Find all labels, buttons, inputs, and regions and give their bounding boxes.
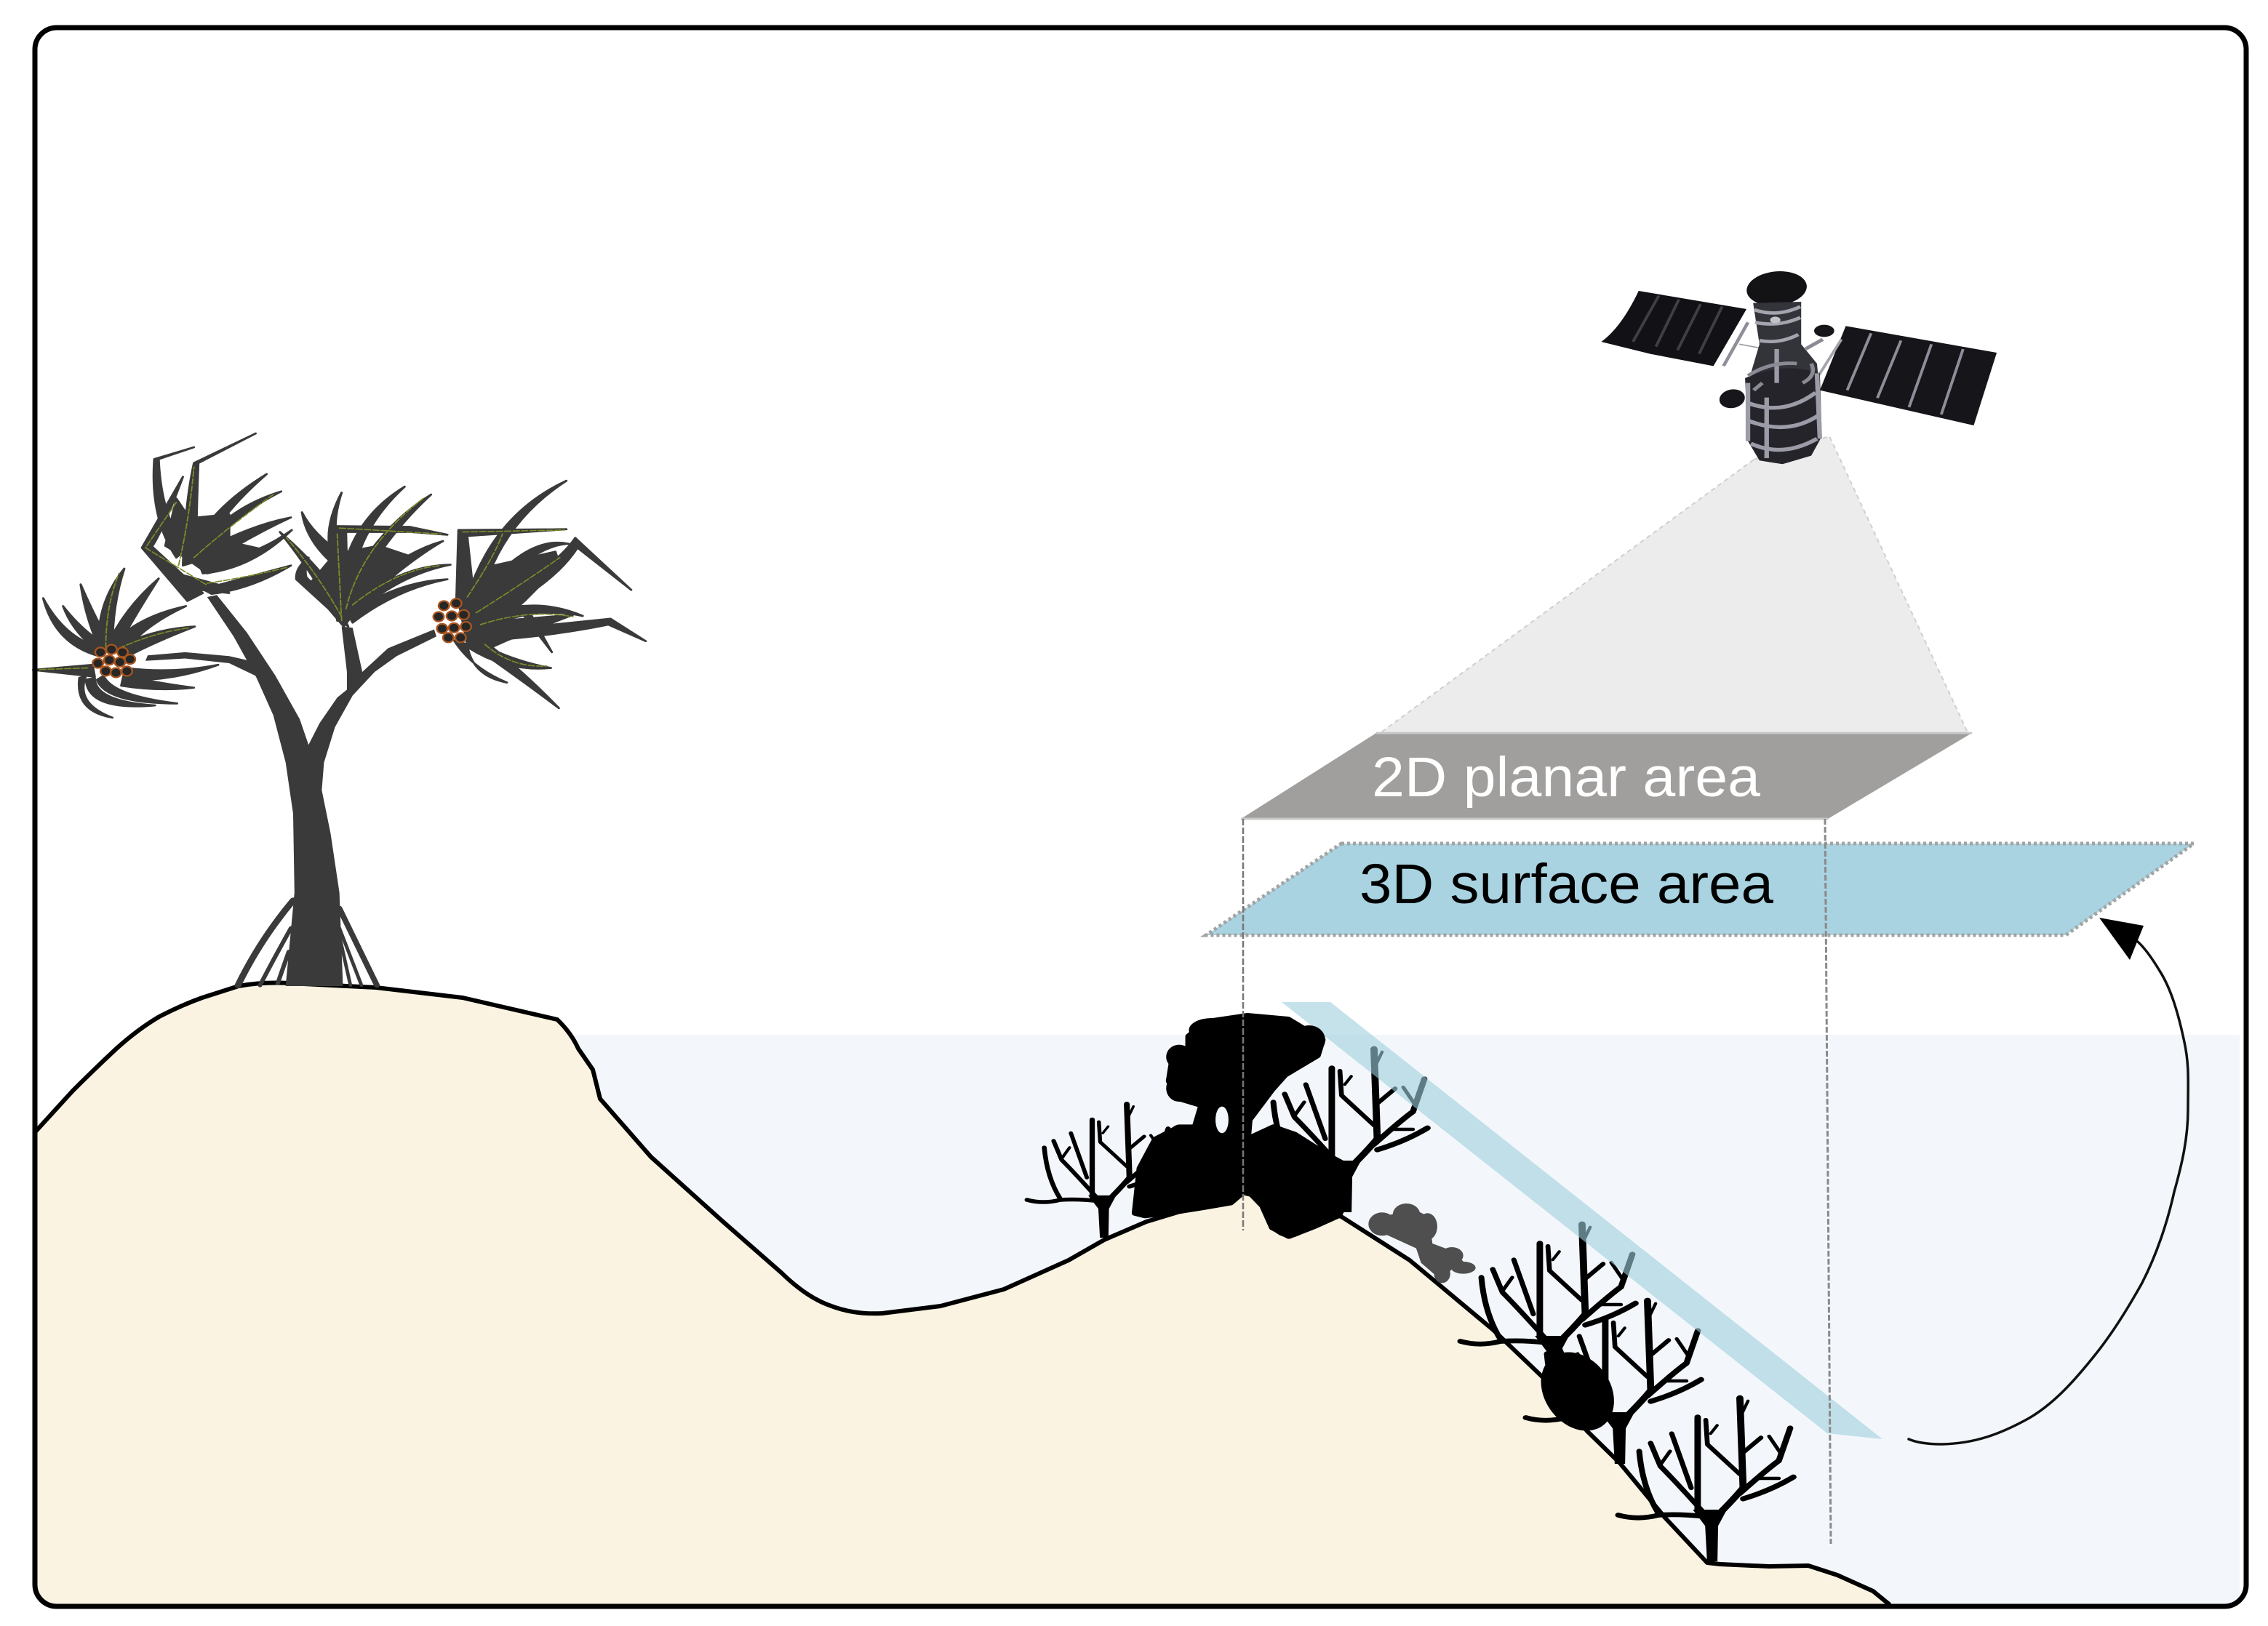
- prop roots: [238, 900, 377, 985]
- label: 2D planar area: 2D planar area: [1372, 746, 1760, 809]
- curved arrow from reef surface to flattened 3D area: [1909, 918, 2188, 1444]
- arrowhead: [2099, 918, 2144, 960]
- satellite sensor footprint cone: [1379, 436, 1968, 734]
- water: [560, 1035, 2240, 1603]
- label: 3D surface area: 3D surface area: [1359, 853, 1773, 916]
- coral: branching slope upper: [1461, 1225, 1636, 1387]
- solar panel right: [1817, 326, 1997, 425]
- coral: massive black colony on slope: [1528, 1343, 1627, 1440]
- coral: branching right on reef crest: [1253, 1049, 1428, 1212]
- 3D surface area panel: [1206, 844, 2194, 935]
- antenna dish top: [1744, 268, 1810, 309]
- fruit cluster left: [92, 645, 135, 678]
- solar panel left: [1601, 291, 1760, 366]
- tree: pandanus: [33, 433, 646, 986]
- 3D reef surface strip: [1282, 1002, 1882, 1439]
- coral: branching slope lower: [1618, 1398, 1794, 1561]
- coral: grey encrusting colony: [1368, 1204, 1476, 1283]
- shoreline outline: [35, 983, 1889, 1604]
- coral: branching slope middle: [1526, 1301, 1701, 1464]
- middle crown: [280, 486, 450, 627]
- 2D planar area panel: [1241, 733, 1972, 819]
- fruit cluster right: [434, 598, 471, 642]
- right crown: [434, 481, 646, 708]
- dashed projection line left: [1242, 819, 1244, 1230]
- small dish upper right: [1814, 325, 1834, 337]
- lower body: [1745, 340, 1823, 464]
- coral: massive black colony on reef crest: [1135, 1016, 1351, 1238]
- upper body: [1748, 302, 1818, 383]
- satellite: [1601, 268, 1997, 464]
- tree trunk and branches: [145, 595, 436, 986]
- coral: branching left on reef crest: [1027, 1104, 1171, 1238]
- lower left crown: [33, 569, 218, 718]
- upper left crown: [142, 433, 292, 601]
- small dish lower left: [1716, 386, 1748, 411]
- ground: sand cross-section: [35, 983, 1889, 1604]
- dashed projection line right: [1825, 819, 1831, 1544]
